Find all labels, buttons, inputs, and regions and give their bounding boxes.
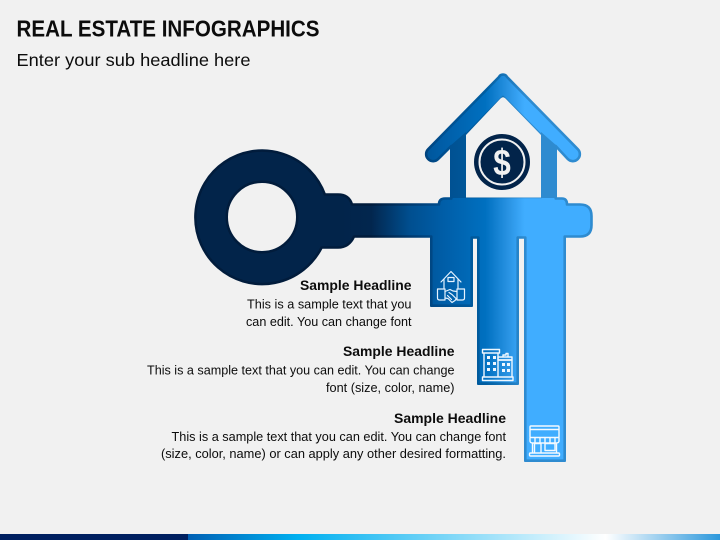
icon: house and handshake bbox=[438, 272, 464, 302]
footer bar bbox=[0, 534, 720, 540]
icon: dollar coin: $ bbox=[493, 143, 511, 184]
subtitle: Enter your sub headline here bbox=[16, 50, 250, 70]
title: REAL ESTATE INFOGRAPHICS bbox=[16, 16, 320, 42]
right house wall bbox=[541, 132, 557, 198]
text block 3 bbox=[161, 411, 507, 461]
key and house graphic bbox=[195, 75, 591, 461]
body 3: (size, color, name) or can apply any other desired formatting. bbox=[161, 447, 506, 461]
house doorway edge bbox=[466, 97, 541, 198]
key body with bow, shaft, house roof and three teeth bbox=[195, 75, 591, 461]
body 1: This is a sample text that you bbox=[247, 298, 412, 312]
headline 3: Sample Headline bbox=[394, 411, 507, 426]
body 3: This is a sample text that you can edit. You can change font bbox=[172, 430, 506, 444]
headline 1: Sample Headline bbox=[300, 278, 412, 293]
text block 1 bbox=[246, 278, 412, 329]
body 2: font (size, color, name) bbox=[326, 381, 454, 395]
headline 2: Sample Headline bbox=[343, 344, 455, 359]
icon: storefront bbox=[530, 426, 560, 456]
left house wall bbox=[450, 132, 466, 198]
text block 2 bbox=[147, 344, 455, 395]
body 1 bbox=[246, 298, 412, 329]
body 2 bbox=[147, 364, 454, 395]
body 3 bbox=[161, 430, 506, 461]
body 1: can edit. You can change font bbox=[246, 315, 412, 329]
icon: dollar coin bbox=[474, 134, 530, 190]
body 2: This is a sample text that you can edit. You can change bbox=[147, 364, 454, 378]
icon: office buildings bbox=[482, 350, 513, 380]
